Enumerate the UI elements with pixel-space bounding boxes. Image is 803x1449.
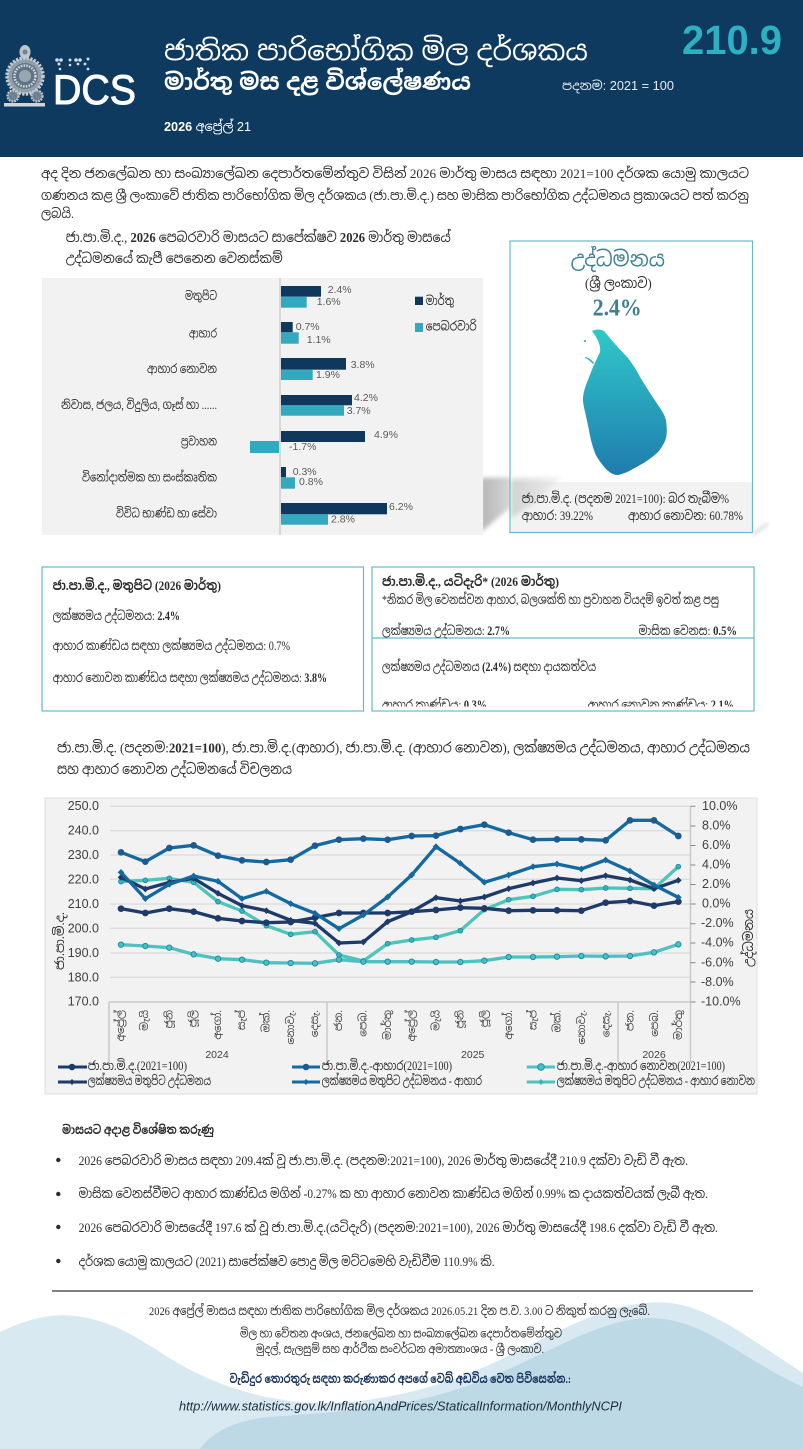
chart legend: ලක්ෂ්‍යමය මතුපිට උද්ධමනය	[88, 1072, 211, 1088]
chart legend: ජා.පා.මි.ද.-ආහාර(2021=100)	[322, 1058, 452, 1073]
month labels: දෙසැ.	[602, 1010, 612, 1037]
chart legend: ජා.පා.මි.ද.-ආහාර නොවන(2021=100)	[557, 1058, 725, 1073]
bar values: 3.7%	[347, 405, 371, 417]
icon: national emblem	[4, 45, 45, 106]
footer text: වැඩිදුර තොරතුරු සඳහා කරුණාකර අපගේ වෙබ් අඩවිය වෙත පිවිසෙන්න.:	[230, 1370, 571, 1386]
right axis labels: -4.0%	[701, 936, 734, 950]
series: CPI non-food	[118, 942, 681, 966]
bar values: 1.9%	[316, 369, 340, 381]
left axis title: ජා.පා.මි.ද.	[52, 912, 67, 970]
highlights list: මාසික වෙනස්වීමට ආහාර කාණ්ඩය මගින් -0.27% ක හා ආහාර නොවන කාණ්ඩය මගින් 0.99% ක දායකත්වයක් ලැබී ඇත.	[79, 1185, 708, 1201]
highlights list: 2026 පෙබරවාරි මාසයේදී 197.6 ක් වූ ජා.පා.මි.ද.(යටිදැරි) (පදනම:2021=100), 2026 මාර්තු මාසයේදී 198.6 දක්වා වැඩි වී ඇත.	[79, 1219, 718, 1235]
month labels: පෙබ.	[358, 1010, 370, 1037]
month labels: සැප්	[526, 1009, 540, 1030]
grid lines	[110, 806, 690, 977]
shadow behind bar chart	[481, 477, 511, 532]
bar values: 4.9%	[374, 429, 398, 441]
right axis labels: 0.0%	[702, 897, 730, 911]
month labels: අප්‍රේල්	[404, 1010, 418, 1041]
icon: Sri Lanka map	[583, 330, 667, 475]
right axis title: උද්ධමනය	[740, 909, 756, 967]
footer text: http://www.statistics.gov.lk/InflationAndPrices/StaticalInformation/MonthlyNCPI	[179, 1399, 622, 1414]
month labels: ඔක්.	[258, 1010, 272, 1032]
footer text: මුදල්, සැලසුම් සහ ආර්ථික සංවර්ධන අමාත්‍යාංශය - ශ්‍රී ලංකාව.	[256, 1342, 544, 1356]
axis frame	[109, 806, 696, 1062]
country label: (ශ්‍රී ලංකාව)	[585, 276, 652, 292]
right axis labels: 6.0%	[702, 838, 730, 852]
bar values	[289, 284, 413, 526]
panel title: උද්ධමනය	[571, 246, 665, 272]
panel: headline CPI: ආහාර කාණ්ඩය සඳහා ලක්ෂ්‍යමය උද්ධමනය: 0.7%	[53, 637, 290, 653]
panel: core CPI	[372, 567, 754, 712]
category labels: විනෝදාත්මක හා සංස්කෘතික	[82, 470, 217, 485]
bar values: 0.3%	[293, 466, 317, 478]
month labels: අගෝ.	[501, 1010, 515, 1040]
panel: headline CPI: ජා.පා.මි.ද., මතුපිට (2026 මාර්තු)	[53, 577, 221, 594]
month labels: ජූලි	[479, 1010, 491, 1027]
chart legend	[58, 1058, 755, 1088]
highlights list: 2026 පෙබරවාරි මාසය සඳහා 209.4ක් වූ ජා.පා.මි.ද. (පදනම:2021=100), 2026 මාර්තු මාසයේදී 210.9 දක්වා වැඩි වී ඇත.	[79, 1152, 688, 1168]
right axis labels: -2.0%	[701, 916, 734, 930]
bar chart heading: උද්ධමනයේ කැපී පෙනෙන වෙනස්කම්	[66, 250, 283, 267]
year labels: 2024	[205, 1049, 229, 1061]
bar values: 0.8%	[299, 476, 323, 488]
right axis labels: -10.0%	[701, 994, 741, 1008]
category labels: ආහාර නොවන	[147, 362, 217, 376]
bar values: 1.1%	[307, 334, 331, 346]
March bars	[281, 286, 387, 514]
month labels: පෙබ.	[649, 1010, 661, 1037]
monthly highlights heading: මාසයට අදාළ විශේෂිත කරුණු	[62, 1121, 214, 1138]
date: 2026 අප්‍රේල් 21	[164, 118, 251, 134]
icon: DCS dots	[55, 58, 90, 70]
left axis labels: 170.0	[68, 994, 99, 1008]
left axis labels: 250.0	[68, 799, 99, 813]
bar values: 2.8%	[331, 514, 355, 526]
panel: core CPI: ආහාර නොවන කාණ්ඩය: 2.1%	[588, 697, 734, 712]
category labels: විවිධ භාණ්ඩ හා සේවා	[116, 506, 217, 521]
right axis labels: 4.0%	[702, 858, 730, 872]
weights: ආහාර නොවන: 60.78%	[628, 508, 743, 523]
bar values: 0.7%	[296, 321, 320, 333]
series: food inflation	[121, 847, 678, 929]
month labels: ඔක්.	[550, 1010, 564, 1032]
month labels: මාර්තු	[671, 1010, 685, 1040]
panel: headline CPI: ලක්ෂ්‍යමය උද්ධමනය: 2.4%	[53, 607, 180, 623]
left axis labels	[68, 799, 99, 1008]
bar values: 6.2%	[389, 501, 413, 513]
panel: inflation change bar chart	[42, 278, 483, 535]
weights: ජා.පා.මි.ද. (පදනම 2021=100): බර තැබීම%	[522, 490, 729, 506]
month labels: සැප්	[234, 1009, 248, 1030]
right axis labels: 8.0%	[702, 818, 730, 832]
chart legend: ජා.පා.මි.ද.(2021=100)	[88, 1058, 187, 1073]
bar chart heading	[66, 229, 451, 267]
series: overall CPI	[118, 898, 682, 926]
left axis labels: 240.0	[68, 824, 99, 838]
panel: core CPI: *නිකර මිල වෙනස්වන ආහාර, බලශක්ති හා ප්‍රවාහන වියදම් ඉවත් කළ පසු	[382, 592, 719, 607]
bar values: 1.6%	[317, 296, 341, 308]
footer text: මිල හා වේතන අංශය, ජනලේඛන හා සංඛ්‍යාලේඛන දෙපාර්තමේන්තුව	[240, 1327, 562, 1341]
panel: core CPI: මාසික වෙනස: 0.5%	[638, 624, 737, 638]
series: CPI food	[118, 817, 682, 865]
panel: core CPI: ජා.පා.මි.ද., යටිදැරි* (2026 මාර්තු)	[382, 573, 559, 590]
month labels: අප්‍රේල්	[113, 1010, 127, 1041]
legend: පෙබරවාරි	[426, 319, 477, 334]
footer text: 2026 අප්‍රේල් මාසය සඳහා ජාතික පාරිභෝගික මිල දර්ශකය 2026.05.21 දින ප.ව. 3.00 ට නිකුත් කරනු ලැබේ.	[149, 1303, 650, 1318]
month labels: ජූලි	[188, 1010, 200, 1027]
February bars	[250, 297, 344, 525]
bar values: 2.4%	[328, 284, 352, 296]
left axis labels: 200.0	[68, 921, 99, 935]
category labels: නිවාස, ජලය, විදුලිය, ගෑස් හා ......	[61, 397, 217, 412]
right axis labels: 10.0%	[702, 799, 737, 813]
month labels: ජූනි	[164, 1010, 176, 1028]
right axis labels	[701, 799, 741, 1008]
line chart heading: ජා.පා.මි.ද. (පදනම:2021=100), ජා.පා.මි.ද.(ආහාර), ජා.පා.මි.ද. (ආහාර නොවන), ලක්ෂ්‍යමය උද්ධමනය, ආහාර උද්ධමනය	[57, 739, 750, 757]
bar values: -1.7%	[289, 441, 316, 453]
month labels: නොවැ.	[576, 1010, 588, 1044]
month labels: නොවැ.	[285, 1010, 297, 1044]
line chart heading	[57, 739, 750, 778]
year labels: 2025	[461, 1049, 485, 1061]
bar values: 4.2%	[354, 392, 378, 404]
month labels	[113, 1009, 685, 1044]
left axis labels: 190.0	[68, 946, 99, 960]
month labels: මාර්තු	[380, 1010, 394, 1040]
base year: පදනම: 2021 = 100	[562, 79, 674, 93]
line chart heading: සහ ආහාර නොවන උද්ධමනයේ විචලනය	[57, 760, 292, 778]
month labels: දෙසැ.	[310, 1010, 321, 1037]
left axis labels: 210.0	[68, 897, 99, 911]
data series	[118, 817, 682, 966]
year labels: 2026	[642, 1049, 666, 1061]
month labels: මැයි	[139, 1010, 151, 1031]
weights	[522, 490, 743, 523]
inflation rate: 2.4%	[593, 296, 642, 322]
series: non-food inflation	[119, 864, 681, 963]
year labels	[205, 1049, 666, 1061]
logo text: DCS	[53, 66, 136, 113]
bar chart heading: ජා.පා.මි.ද., 2026 පෙබරවාරි මාසයට සාපේක්ෂව 2026 මාර්තු මාසයේ	[66, 229, 451, 246]
bar values: 3.8%	[351, 359, 375, 371]
footer background waves	[0, 1302, 803, 1449]
right axis labels: 2.0%	[702, 877, 730, 891]
left axis labels: 180.0	[68, 970, 99, 984]
intro paragraph: ලබයි.	[41, 206, 74, 221]
weights: ආහාර: 39.22%	[522, 508, 593, 523]
highlights list	[56, 1152, 718, 1269]
series: headline inflation	[121, 876, 678, 943]
panel: headline CPI: ආහාර නොවන කාණ්ඩය සඳහා ලක්ෂ්‍යමය උද්ධමනය: 3.8%	[53, 669, 327, 685]
right axis labels: -6.0%	[701, 955, 734, 969]
legend	[415, 293, 477, 334]
title: ජාතික පාරිභෝගික මිල දර්ශකය	[164, 33, 588, 67]
footer text	[149, 1303, 650, 1414]
category labels	[61, 289, 217, 521]
right axis labels: -8.0%	[701, 975, 734, 989]
highlights list: දර්ශක යොමු කාලයට (2021) සාපේක්ෂව පොදු මිල මට්ටමෙහි වැඩිවීම 110.9% කි.	[79, 1253, 495, 1269]
left axis labels: 220.0	[68, 872, 99, 886]
header banner	[0, 0, 803, 157]
subtitle: මාර්තු මස දළ විශ්ලේෂණය	[164, 67, 471, 96]
intro paragraph: අද දින ජනලේඛන හා සංඛ්‍යාලේඛන දෙපාර්තමේන්තුව විසින් 2026 මාර්තු මාසය සඳහා 2021=100 දර්ශක යොමු කාලයට	[41, 165, 749, 181]
panel: headline CPI	[42, 567, 364, 711]
month labels: අගෝ.	[210, 1010, 224, 1040]
intro paragraph: ගණනය කළ ශ්‍රී ලංකාවේ ජාතික පාරිභෝගික මිල දර්ශකය (ජා.පා.මි.ද.) සහ මාසික පාරිභෝගික උද්ධමනය ප්‍රකාශයට පත් කරනු	[41, 187, 749, 203]
panel: Sri Lanka inflation	[510, 241, 752, 532]
month labels: මැයි	[430, 1010, 442, 1031]
panel: CPI and inflation line chart	[45, 798, 757, 1094]
month labels: ජන.	[624, 1010, 636, 1031]
category labels: මතුපිට	[185, 289, 217, 303]
category labels: ප්‍රවාහන	[181, 435, 217, 449]
panel: core CPI: ආහාර කාණ්ඩය: 0.3%	[382, 697, 487, 712]
legend: මාර්තු	[426, 293, 454, 308]
left axis labels: 230.0	[68, 848, 99, 862]
panel: core CPI: ලක්ෂ්‍යමය උද්ධමනය (2.4%) සඳහා දායකත්වය	[382, 658, 596, 674]
chart legend: ලක්ෂ්‍යමය මතුපිට උද්ධමනය - ආහාර	[322, 1072, 482, 1088]
intro paragraph	[41, 165, 749, 221]
month labels: ජූනි	[454, 1010, 466, 1028]
category labels: ආහාර	[189, 327, 217, 341]
panel: core CPI: ලක්ෂ්‍යමය උද්ධමනය: 2.7%	[382, 622, 510, 638]
headline index value: 210.9	[682, 17, 782, 63]
month labels: ජන.	[333, 1010, 345, 1031]
